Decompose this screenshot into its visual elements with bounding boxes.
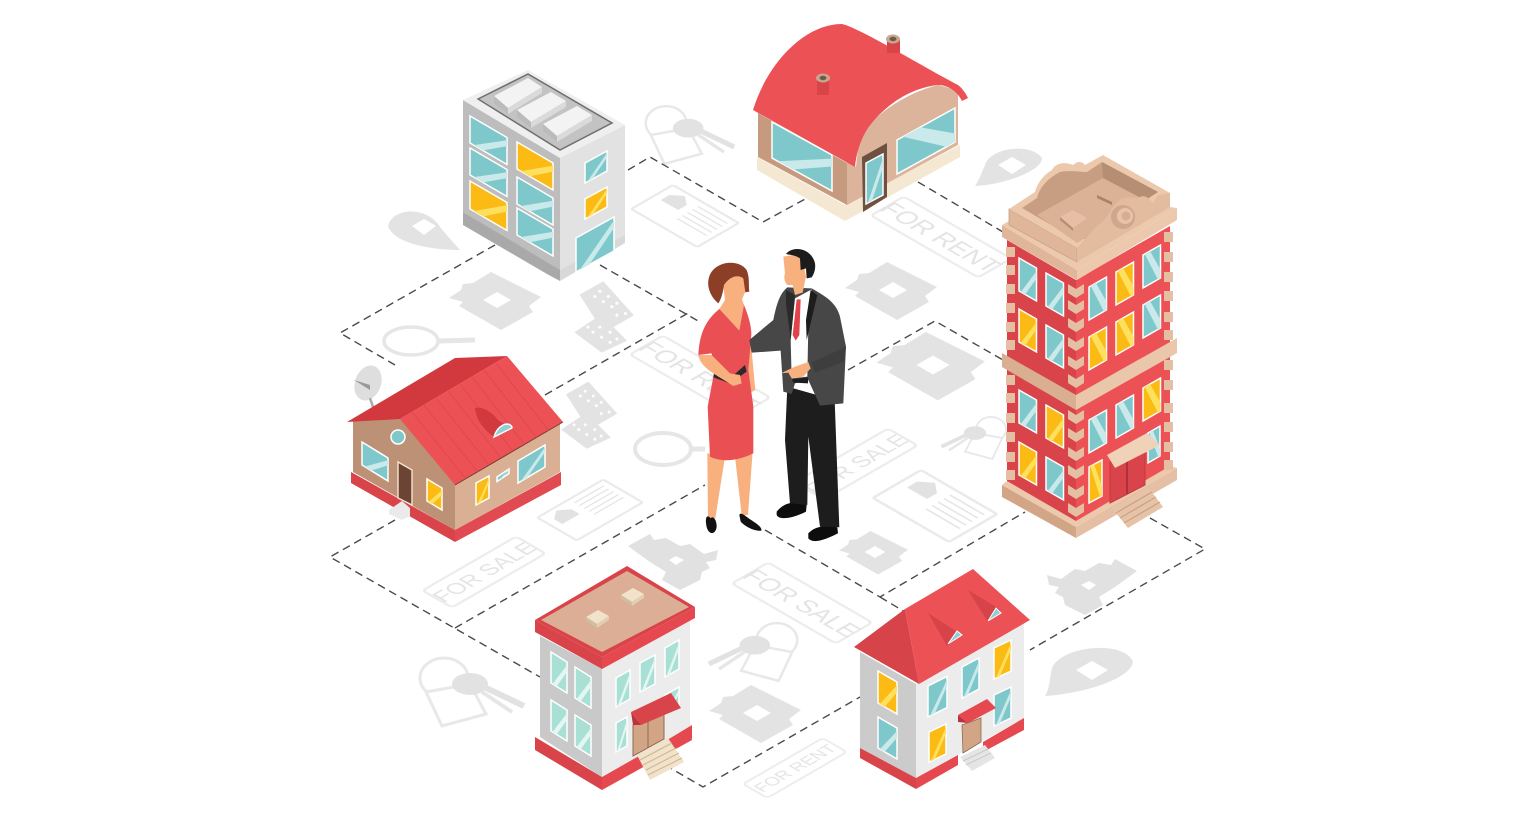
roof skylights xyxy=(494,78,592,142)
base plinth xyxy=(1002,466,1177,538)
roof xyxy=(347,356,507,422)
steps xyxy=(389,501,410,520)
man xyxy=(749,249,846,541)
sign: for rent behind woman: FOR RENT xyxy=(632,338,767,415)
building: red brick tower xyxy=(1002,155,1177,538)
tower top xyxy=(1002,155,1177,280)
dress xyxy=(698,303,753,460)
sign: for sale right: FOR SALE xyxy=(799,431,914,498)
right arm xyxy=(745,340,755,393)
tower door, awning and stairs xyxy=(1107,433,1163,528)
house windows and door xyxy=(362,430,545,510)
dormer xyxy=(475,408,512,437)
sign: for rent: FOR RENT xyxy=(873,199,1008,276)
woman xyxy=(698,263,761,533)
building: cottage with curved roof xyxy=(753,24,968,221)
icon: magnifiers xyxy=(384,327,705,465)
icon: dotted blocks xyxy=(561,281,634,449)
cottage roof xyxy=(753,24,968,167)
windows xyxy=(551,640,679,756)
icon: houses xyxy=(449,262,985,743)
middle band xyxy=(1002,338,1177,410)
trousers xyxy=(785,387,839,527)
satellite dish xyxy=(350,362,386,407)
building: gabled townhouse xyxy=(854,569,1030,789)
chimneys xyxy=(816,34,900,95)
dashed connecting paths xyxy=(330,157,1205,787)
windows xyxy=(470,116,614,272)
icon: location pins xyxy=(388,149,1133,696)
sleeve xyxy=(812,347,846,373)
head xyxy=(783,253,806,295)
roof vents xyxy=(586,588,644,628)
belt xyxy=(713,365,747,383)
sign: for rent bottom: FOR RENT xyxy=(750,742,841,795)
people xyxy=(698,249,846,541)
head and neck xyxy=(719,273,746,331)
waist and hand xyxy=(792,377,808,383)
sign: for sale centre: FOR SALE xyxy=(735,566,867,641)
dormers xyxy=(928,590,1001,646)
quoins xyxy=(1006,232,1173,517)
windows xyxy=(878,640,1011,762)
icon: documents xyxy=(537,185,997,542)
building: gray apartment block xyxy=(463,70,625,281)
shirt xyxy=(791,289,812,378)
cottage windows and door xyxy=(772,108,955,212)
door, awning and steps xyxy=(958,699,996,771)
jacket xyxy=(749,287,846,406)
sign: for sale left: FOR SALE xyxy=(427,539,542,606)
tie xyxy=(793,299,801,341)
roof xyxy=(854,609,919,684)
shoes xyxy=(777,503,807,518)
tower windows xyxy=(1019,245,1160,503)
building: brick-roof house xyxy=(347,356,563,542)
icon: large house silhouettes xyxy=(628,534,1137,615)
forearm xyxy=(698,355,742,386)
hair xyxy=(708,263,749,303)
shoes xyxy=(706,516,717,533)
roof xyxy=(535,566,695,657)
icon: keys xyxy=(420,106,1006,726)
building: flat-roof apartments xyxy=(535,566,695,790)
door, awning and stairs xyxy=(631,693,692,780)
legs xyxy=(707,453,725,518)
hair xyxy=(786,249,815,278)
gray background icons xyxy=(384,106,1137,798)
